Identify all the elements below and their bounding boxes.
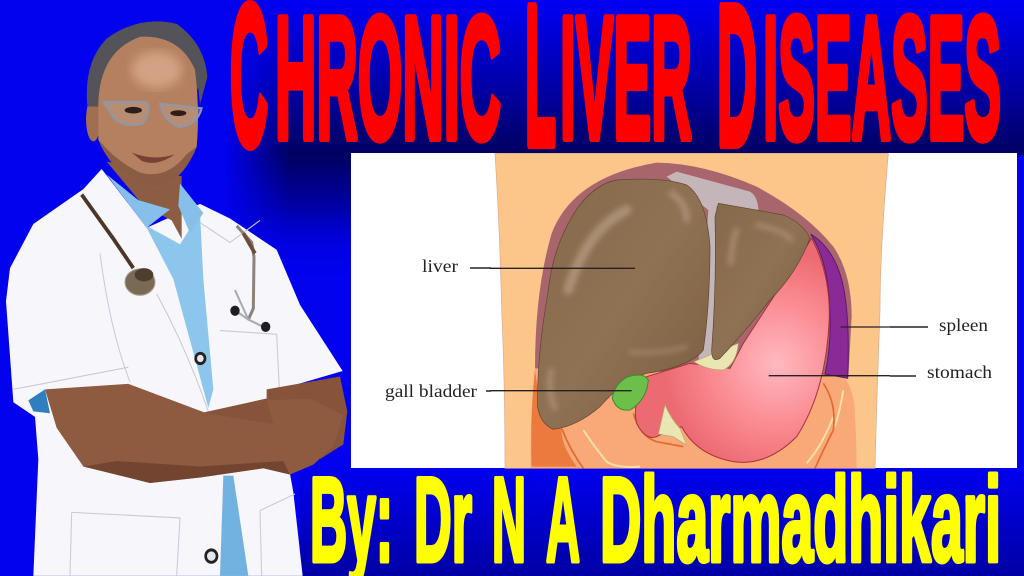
coat shading bbox=[13, 220, 295, 576]
main arm and hand bbox=[45, 384, 343, 483]
stomach bbox=[635, 238, 829, 462]
eyes bbox=[125, 107, 142, 113]
label: gall bladder: gall bladder bbox=[385, 381, 477, 401]
leader lines bbox=[490, 268, 890, 391]
liver right lobe bbox=[712, 203, 810, 360]
glasses bbox=[103, 102, 202, 127]
torso bbox=[495, 153, 888, 468]
neck bbox=[107, 162, 182, 239]
pale tissue bbox=[658, 343, 738, 445]
byline bbox=[310, 453, 1001, 576]
label: liver: liver bbox=[422, 256, 458, 276]
leader: spleen bbox=[890, 326, 928, 328]
shirt collar bbox=[107, 174, 203, 233]
label: spleen: spleen bbox=[939, 315, 988, 335]
leader: stomach bbox=[890, 375, 916, 377]
background bbox=[228, 14, 1024, 576]
spleen bbox=[811, 234, 848, 378]
abdominal cavity lining bbox=[535, 163, 852, 377]
white coat bbox=[6, 169, 343, 576]
label: stomach: stomach bbox=[927, 362, 992, 382]
mouth bbox=[132, 152, 175, 163]
liver left lobe bbox=[538, 179, 710, 429]
panel: liver anatomy illustration bbox=[351, 153, 1017, 468]
liver highlights bbox=[550, 193, 792, 408]
hair bbox=[87, 21, 207, 118]
coat buttons bbox=[196, 353, 217, 562]
gall bladder bbox=[612, 375, 648, 410]
stethoscope bbox=[82, 195, 270, 332]
leader: liver bbox=[470, 267, 491, 269]
blue shirt bbox=[105, 173, 213, 408]
leader: gall bladder bbox=[486, 390, 491, 392]
ear bbox=[86, 97, 101, 141]
face bbox=[98, 37, 198, 187]
forearm behind bbox=[200, 376, 347, 459]
doctor portrait bbox=[6, 21, 347, 576]
intestines bbox=[531, 368, 857, 468]
ligament bbox=[667, 172, 758, 363]
